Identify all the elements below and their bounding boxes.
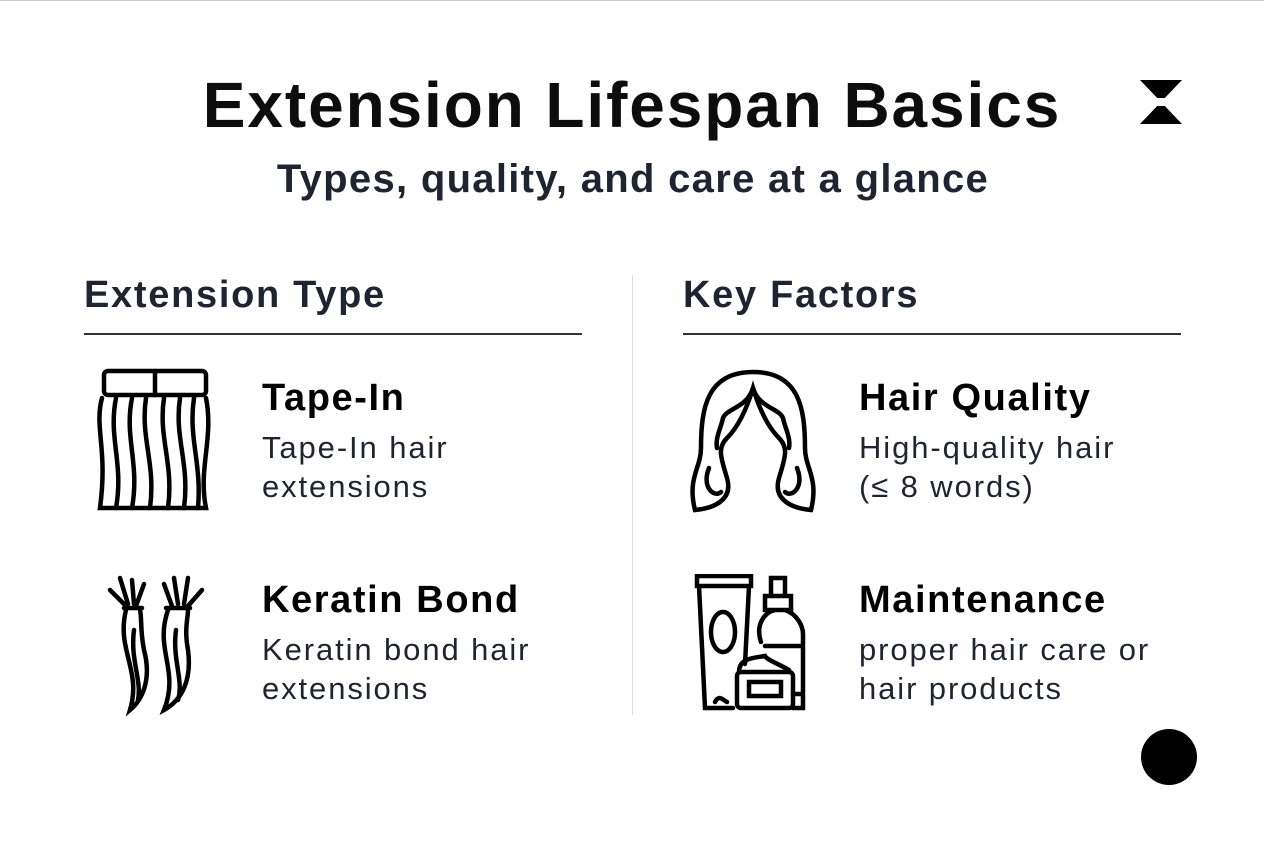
- subtitle: Types, quality, and care at a glance: [277, 157, 989, 201]
- text: keratin bond: Keratin bond hair: [262, 632, 530, 667]
- text: tape-in: [262, 377, 449, 504]
- text: hair quality: High-quality hair: [859, 430, 1115, 465]
- text: maintenance: hair products: [859, 671, 1063, 706]
- text: hair quality: [859, 377, 1115, 504]
- text: keratin bond: Keratin Bond: [262, 579, 520, 621]
- icon: hourglass: [1140, 80, 1182, 124]
- text: hair quality: Hair Quality: [859, 377, 1092, 419]
- text: tape-in: Tape-In hair: [262, 430, 449, 465]
- title: Extension Lifespan Basics: [203, 69, 1061, 141]
- text: maintenance: proper hair care or: [859, 632, 1150, 667]
- text: tape-in: Tape-In: [262, 377, 406, 419]
- text: maintenance: Maintenance: [859, 579, 1107, 621]
- heading: key factors: Key Factors: [683, 274, 919, 316]
- panel: extension type: [84, 274, 582, 716]
- icon: hair products: [694, 574, 806, 710]
- text: maintenance: [859, 579, 1150, 706]
- icon: hair: [690, 370, 816, 512]
- panel: key factors: [683, 274, 1181, 710]
- text: keratin bond: extensions: [262, 671, 429, 706]
- icon: keratin bond: [108, 576, 204, 716]
- text: hair quality: (≤ 8 words): [859, 469, 1035, 504]
- decorative dot: [1141, 729, 1197, 785]
- icon: tape-in: [97, 368, 211, 510]
- heading: extension type: Extension Type: [84, 274, 386, 316]
- text: tape-in: extensions: [262, 469, 429, 504]
- text: keratin bond: [262, 579, 530, 706]
